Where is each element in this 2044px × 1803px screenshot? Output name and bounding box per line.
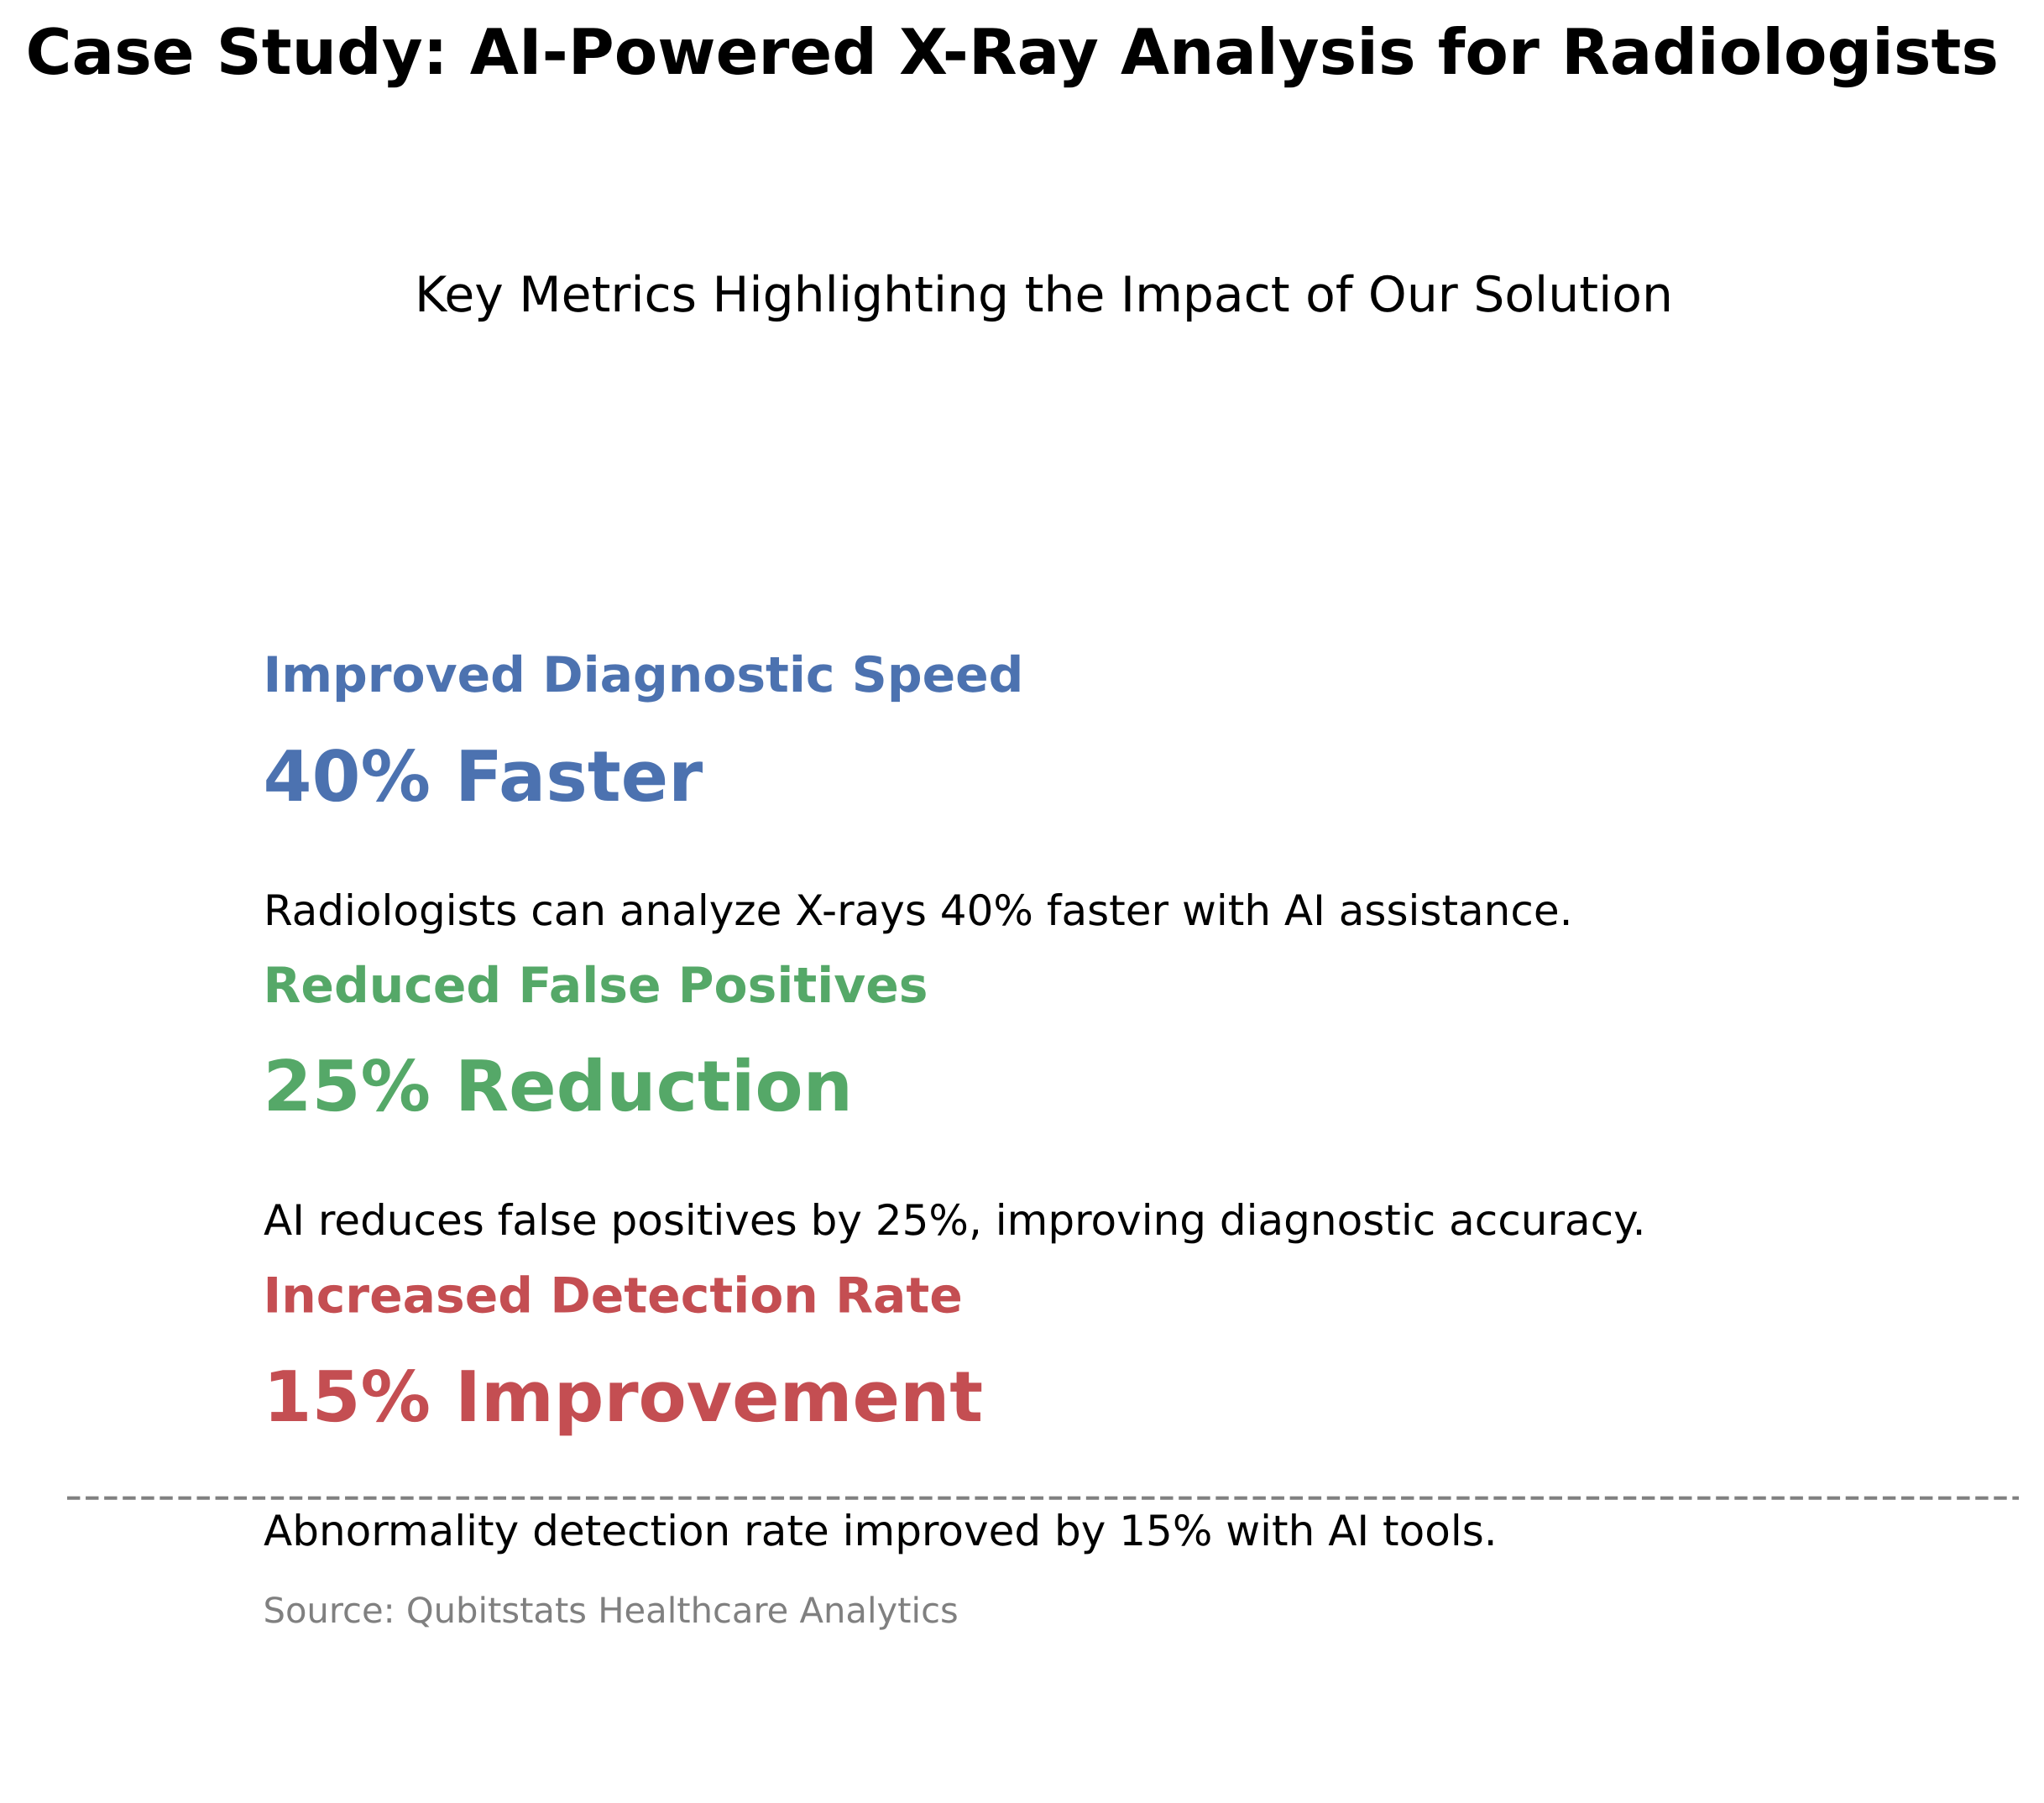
metric heading: Improved Diagnostic Speed bbox=[264, 646, 1023, 703]
metric value: 40% Faster bbox=[264, 736, 703, 818]
metric description: Abnormality detection rate improved by 15% with AI tools. bbox=[264, 1507, 1498, 1555]
source note: Source: Qubitstats Healthcare Analytics bbox=[264, 1590, 959, 1631]
metric description: AI reduces false positives by 25%, improving diagnostic accuracy. bbox=[264, 1196, 1645, 1245]
metric description: Radiologists can analyze X-rays 40% faster with AI assistance. bbox=[264, 886, 1573, 935]
metric value: 25% Reduction bbox=[264, 1046, 853, 1127]
metric heading: Increased Detection Rate bbox=[264, 1267, 963, 1325]
subtitle: Key Metrics Highlighting the Impact of Our Solution bbox=[415, 266, 1673, 323]
metric: reduced false positives bbox=[264, 957, 1645, 1245]
title: Case Study: AI-Powered X-Ray Analysis for Radiologists bbox=[25, 15, 1999, 89]
metric value: 15% Improvement bbox=[264, 1356, 983, 1438]
metric: improved diagnostic speed bbox=[264, 646, 1573, 935]
metric heading: Reduced False Positives bbox=[264, 957, 928, 1014]
metric: increased detection rate bbox=[264, 1267, 1498, 1555]
